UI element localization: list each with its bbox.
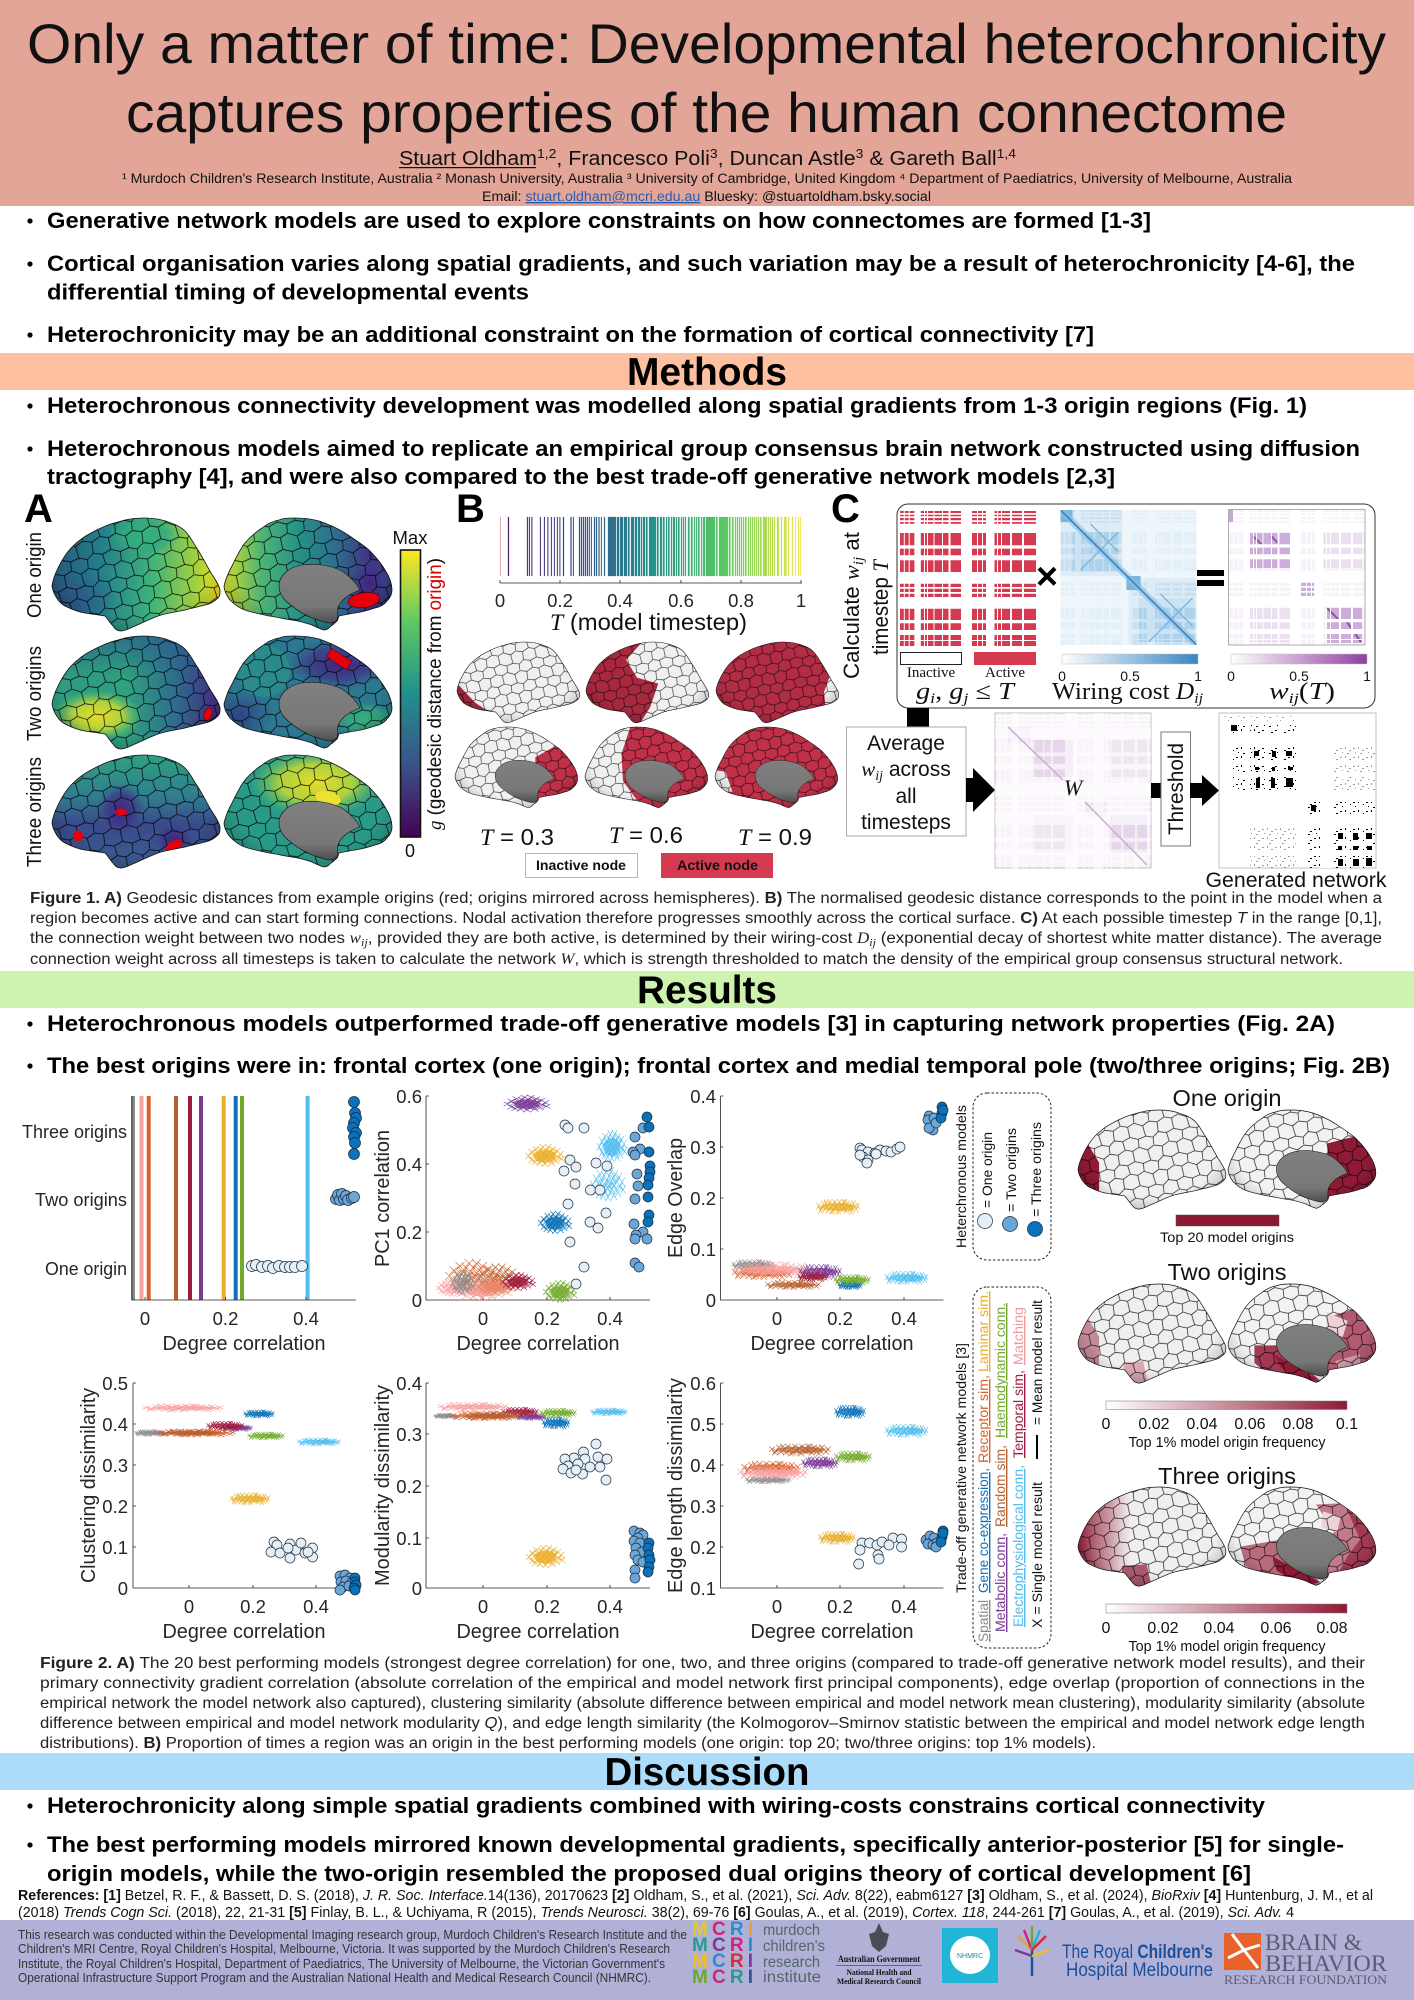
- matrix: wij at T: [1228, 510, 1365, 646]
- chart: edge overlap: 0: [772, 1308, 782, 1329]
- intro bullets: Generative network models are used to explore constraints on how connectomes are formed [1-3]: [47, 208, 1151, 233]
- chart: clustering dissimilarity: 0.2: [102, 1496, 128, 1517]
- label: generated network: Generated network: [1206, 869, 1387, 892]
- math label: wij of T: T): [1309, 679, 1333, 705]
- heading: Three origins: [1158, 1463, 1296, 1489]
- acknowledgements: Institute, the Royal Children's Hospital, Department of Paediatrics, The University of Melbourne, the Victorian Government's: [18, 1957, 665, 1971]
- math label: g condition: ≤: [968, 679, 998, 705]
- box: average across timesteps: [846, 727, 966, 836]
- discussion bullets: The best performing models mirrored known developmental gradients, specifically anterior-posterior [5] for single-: [47, 1832, 1344, 1857]
- references: References: [1] Betzel, R. F., & Bassett, D. S. (2018), J. R. Soc. Interface.14(136), 20170623 [2] Oldham, S., et al. (2021), Sci. Adv. 8(22), eabm6127 [3] Oldham, S., et al. (2024), BioRxiv [4] Huntenburg, J. M., et al: [18, 1888, 1373, 1904]
- brain lateral: [1078, 1487, 1226, 1588]
- figure 2 caption: primary connectivity gradient correlation (absolute correlation of the empirical and model network first principal components), edge overlap (proportion of connections in the: [40, 1675, 1365, 1692]
- chart: clustering dissimilarity: 0.1: [102, 1537, 128, 1558]
- intro bullets: Heterochronicity may be an additional constraint on the formation of cortical connectivity [7]: [47, 322, 1094, 347]
- math label: wiring cost: ij: [1194, 691, 1203, 707]
- vertical label: calculate wij: Calculate w: [839, 565, 864, 679]
- authors: & Gareth Ball: [863, 148, 997, 170]
- figure 1 caption: (exponential decay of shortest white matter distance). The average: [876, 930, 1382, 947]
- brain: T=0.6 lateral: [586, 642, 709, 724]
- timestep axis: 0: [495, 590, 505, 611]
- matrix: generated network: [1219, 713, 1376, 868]
- affiliations: ¹ Murdoch Children's Research Institute, Australia ² Monash University, Australia ³ University of Cambridge, United Kingdom ⁴ Department of Paediatrics, University of Melbourne, Australia: [122, 171, 1293, 186]
- section heading: discussion: Discussion: [604, 1751, 810, 1794]
- legend bar: Top 20 model origins: [1160, 1229, 1294, 1245]
- brain: three origins medial: [224, 749, 392, 870]
- logo: brain and behavior research foundation: [1224, 1930, 1388, 1987]
- legend: trade-off generative network models: Receptor sim,: [975, 1375, 991, 1463]
- colour bar with ticks: 0.1: [1336, 1416, 1358, 1433]
- chart: PC1 correlation: [372, 1086, 655, 1355]
- chart: edge overlap: 0.3: [690, 1137, 716, 1158]
- chart: edge overlap: [665, 1086, 948, 1355]
- figure 1 caption: the connection weight between two nodes w: [30, 930, 360, 947]
- chart: degree correlation by model: Two origins: [35, 1189, 127, 1210]
- chart: modularity dissimilarity: 0: [478, 1596, 488, 1617]
- brain medial: [1228, 1110, 1378, 1211]
- methods bullets: Heterochronous models aimed to replicate an empirical group consensus brain network constructed using diffusion: [47, 436, 1360, 461]
- chart: edge length dissimilarity: Edge length dissimilarity: [665, 1378, 687, 1593]
- chart: clustering dissimilarity: 0.5: [102, 1373, 128, 1394]
- chart: PC1 correlation: Degree correlation: [456, 1333, 620, 1355]
- authors: 1,4: [997, 146, 1016, 161]
- math label: wij of T: ij: [1289, 691, 1299, 707]
- timestep axis: 0.8: [728, 590, 754, 611]
- legend: heterochronous models: [953, 1093, 1051, 1260]
- math label: g condition: g: [916, 679, 928, 705]
- colour bar with ticks: 0.06: [1260, 1620, 1292, 1637]
- title: Only a matter of time: Developmental heterochronicity: [27, 12, 1386, 75]
- chart: modularity dissimilarity: Modularity dissimilarity: [372, 1385, 394, 1586]
- authors: [399, 146, 1016, 170]
- legend: trade-off generative network models: Spatial: [975, 1600, 991, 1642]
- brain: T=0.9 lateral: [716, 642, 840, 724]
- chart: degree correlation by model: 0.4: [293, 1308, 319, 1329]
- logo: murdoch children's research institute: M C R I: [692, 1951, 753, 1972]
- chart: edge overlap: 0: [706, 1290, 716, 1311]
- colour bar: wij: 0: [1227, 668, 1235, 684]
- legend: active node: Active node: [677, 857, 758, 873]
- math label: wiring cost: Wiring cost D: [1052, 679, 1193, 705]
- matrix: active nodes: [900, 511, 1036, 647]
- discussion bullets: Heterochronicity along simple spatial gradients combined with wiring-costs constrains cortical connectivity: [47, 1793, 1266, 1818]
- barcode of nodal activation times: [500, 517, 801, 576]
- discussion bullets: origin models, while the two-origin resembled the proposed dual origins theory of cortical development [6]: [47, 1861, 1251, 1886]
- chart: degree correlation by model: Degree correlation: [162, 1333, 326, 1355]
- references: [18, 1888, 1373, 1921]
- chart: PC1 correlation: 0.2: [534, 1308, 560, 1329]
- vertical label: calculate wij: ij: [851, 557, 867, 565]
- chart: degree correlation by model: [22, 1096, 362, 1355]
- contact line: Email: stuart.oldham@mcri.edu.au Bluesky: @stuartoldham.bsky.social: [482, 189, 931, 204]
- methods bullets: [27, 393, 1360, 489]
- methods bullets: tractography [4], and were also compared to the best trade-off generative network models [2,3]: [47, 464, 1115, 489]
- results bullets: The best origins were in: frontal cortex (one origin); frontal cortex and medial temporal pole (two/three origins; Fig. 2B): [47, 1053, 1390, 1078]
- chart: clustering dissimilarity: 0.4: [303, 1596, 329, 1617]
- logo: murdoch children's research institute: M C R I: [692, 1935, 753, 1956]
- logo: australian government NHMRC: Medical Research Council: [837, 1976, 922, 1986]
- colour bar: geodesic distance: g (geodesic distance from origin): [425, 558, 446, 830]
- arrow to W: [966, 768, 995, 812]
- chart: edge length dissimilarity: 0.6: [690, 1373, 716, 1394]
- chart: degree correlation by model: 0.2: [213, 1308, 238, 1329]
- chart: modularity dissimilarity: 0: [412, 1578, 422, 1599]
- chart: edge overlap: 0.2: [690, 1188, 716, 1209]
- math label: g condition: g: [949, 679, 961, 705]
- logo: murdoch children's research institute: institute: [763, 1969, 821, 1986]
- logo: australian government NHMRC: [836, 1923, 922, 1986]
- legend: trade-off generative network models: Temporal sim,: [1010, 1370, 1026, 1458]
- logo: NHMRC: [942, 1928, 998, 1983]
- chart: modularity dissimilarity: 0.4: [597, 1596, 623, 1617]
- panel letter B: B: [456, 487, 485, 531]
- chart: edge overlap: Degree correlation: [750, 1333, 914, 1355]
- chart: edge length dissimilarity: 0.2: [827, 1596, 853, 1617]
- matrix: W: [995, 713, 1151, 869]
- timestep labels: T = 0.9: [738, 824, 812, 850]
- chart: modularity dissimilarity: 0.2: [396, 1476, 422, 1497]
- box: average across timesteps: across: [883, 758, 951, 781]
- box: average across timesteps: ij: [875, 769, 883, 784]
- multiply sign: ×: [1036, 556, 1058, 598]
- logo: brain and behavior research foundation: RESEARCH FOUNDATION: [1224, 1973, 1387, 1987]
- chart: edge length dissimilarity: 0.4: [690, 1455, 716, 1476]
- chart: edge length dissimilarity: 0: [772, 1596, 782, 1617]
- chart: edge length dissimilarity: 0.3: [690, 1496, 716, 1517]
- box: average across timesteps: w: [861, 757, 883, 784]
- chart: clustering dissimilarity: 0.2: [240, 1596, 266, 1617]
- section heading: methods: Methods: [627, 351, 787, 394]
- connector to threshold: [1151, 783, 1161, 798]
- chart: clustering dissimilarity: Clustering dissimilarity: [78, 1388, 100, 1583]
- brain: three origins lateral: [52, 755, 220, 870]
- chart: edge length dissimilarity: 0.4: [891, 1596, 917, 1617]
- timestep axis: 0.4: [607, 590, 633, 611]
- logo: brain and behavior research foundation: BRAIN &: [1265, 1930, 1362, 1955]
- logo: murdoch children's research institute: M C R I: [692, 1919, 753, 1940]
- chart: modularity dissimilarity: 0.4: [396, 1373, 422, 1394]
- heading: One origin: [1172, 1085, 1282, 1111]
- chart: edge length dissimilarity: 0.2: [690, 1537, 716, 1558]
- connector: [907, 708, 929, 727]
- title: captures properties of the human connectome: [126, 81, 1287, 144]
- chart: modularity dissimilarity: 0.1: [396, 1528, 422, 1549]
- authors: 1,2: [537, 146, 556, 161]
- panel A: geodesic distance brains: [24, 487, 446, 870]
- timestep axis: T (model timestep): [550, 609, 747, 635]
- colour bar with ticks: 0.02: [1147, 1620, 1179, 1637]
- section heading: discussion: [0, 1751, 1414, 1794]
- legend: active node: [661, 853, 773, 878]
- figure 1 caption: region becomes active and can start forming connections. Nodal activation therefore progresses smoothly across the cortical surface. C) At each possible timestep T in the range [0,1],: [30, 910, 1382, 927]
- colour bar: geodesic distance: [392, 528, 446, 861]
- timestep axis: [495, 580, 806, 635]
- brain: T=0.3 medial: [455, 727, 579, 810]
- chart: degree correlation by model: Three origins: [22, 1121, 127, 1142]
- chart: PC1 correlation: 0.4: [396, 1154, 422, 1175]
- legend: trade-off generative network models: Electrophysiological conn,: [1010, 1465, 1026, 1627]
- figure 1 caption: ij: [361, 937, 368, 949]
- panel: three origins map: [1078, 1463, 1378, 1655]
- legend: trade-off generative network models: Random sim,: [992, 1445, 1008, 1527]
- chart: edge overlap: 0.4: [690, 1086, 716, 1107]
- chart: edge overlap: 0.1: [690, 1239, 716, 1260]
- colour bar with ticks: 0: [1102, 1620, 1111, 1637]
- chart: modularity dissimilarity: [372, 1373, 655, 1643]
- colour bar: geodesic distance: Max: [392, 528, 428, 548]
- logo: murdoch children's research institute: [692, 1919, 825, 1988]
- chart: clustering dissimilarity: 0.3: [102, 1455, 128, 1476]
- legend: trade-off generative network models: Haemodynamic conn.: [992, 1303, 1008, 1438]
- matrix: wiring cost: [1060, 510, 1196, 646]
- logo: royal children's hospital: [1015, 1926, 1213, 1981]
- legend: inactive and active swatches: [900, 652, 1036, 681]
- methods bullets: Heterochronous connectivity development was modelled along spatial gradients from 1-3 origin regions (Fig. 1): [47, 393, 1307, 418]
- panel letter A: A: [24, 487, 53, 531]
- authors: , Duncan Astle: [718, 148, 856, 170]
- chart: modularity dissimilarity: 0.2: [534, 1596, 560, 1617]
- figure 2 caption: distributions). B) Proportion of times a region was an origin in the best performing models (one origin: top 20; two/three origins: top 1% models).: [40, 1735, 1096, 1752]
- legend: heterochronous models: Heterchronous models: [953, 1105, 969, 1248]
- timestep axis: 1: [796, 590, 806, 611]
- colour bar with ticks: 0.08: [1316, 1620, 1348, 1637]
- brain: T=0.9 medial: [715, 727, 838, 810]
- box: threshold: Threshold: [1165, 743, 1188, 835]
- timestep axis: 0.6: [668, 590, 694, 611]
- panel: two origins map: [1078, 1259, 1378, 1451]
- brain: T=0.6 medial: [585, 727, 709, 810]
- colour bar with ticks: [1102, 1401, 1358, 1451]
- timestep axis: 0.2: [547, 590, 573, 611]
- brain medial: [1228, 1284, 1378, 1385]
- arrow to generated network: [1190, 775, 1219, 806]
- chart: edge overlap: 0.2: [827, 1308, 853, 1329]
- timestep labels: [480, 822, 812, 850]
- brain: one origin lateral: [52, 518, 220, 632]
- math label: wij of T: (: [1299, 679, 1309, 705]
- figure 2 caption: [40, 1655, 1365, 1752]
- legend: trade-off generative network models: [953, 1287, 1051, 1648]
- brain: two origins lateral: [51, 636, 220, 751]
- colour bar: wij: 0.5: [1289, 668, 1309, 684]
- figure 2 caption: difference between empirical and model network modularity Q), and edge length similarity (the Kolmogorov–Smirnov statistic between the empirical and model network edge length: [40, 1715, 1365, 1732]
- logo: australian government NHMRC: National Health and: [846, 1967, 912, 1977]
- acknowledgements: Operational Infrastructure Support Program and the Australian National Health and Medical Research Council (NHMRC).: [18, 1971, 651, 1985]
- colour bar with ticks: 0.04: [1186, 1416, 1218, 1433]
- authors: 3: [710, 146, 718, 161]
- brain medial: [1228, 1487, 1378, 1588]
- logo: murdoch children's research institute: children's: [763, 1938, 825, 1955]
- section heading: results: Results: [637, 969, 777, 1012]
- figure 1 caption: D: [856, 930, 876, 949]
- logo: royal children's hospital: The Royal Children's: [1062, 1942, 1213, 1963]
- chart: PC1 correlation: PC1 correlation: [372, 1130, 394, 1267]
- box: average across timesteps: timesteps: [861, 811, 951, 834]
- discussion bullets: [27, 1793, 1344, 1886]
- legend: trade-off generative network models: Laminar sim.: [975, 1291, 991, 1372]
- figure 1 caption: , provided they are both active, is determined by their wiring-cost: [368, 930, 857, 947]
- vertical label: calculate wij: at: [839, 532, 864, 557]
- panel: one origin map: [1078, 1085, 1378, 1245]
- colour bar: wiring cost: 1: [1194, 668, 1202, 684]
- figure 1 caption: connection weight across all timesteps is taken to calculate the network W, which is strength thresholded to match the density of the empirical group consensus structural network.: [30, 951, 1343, 968]
- brain: two origins medial: [224, 636, 392, 748]
- intro bullets: Cortical organisation varies along spatial gradients, and such variation may be a result of heterochronicity [4-6], the: [47, 251, 1355, 276]
- colour bar with ticks: Top 1% model origin frequency: [1128, 1638, 1326, 1655]
- chart: clustering dissimilarity: [78, 1373, 361, 1643]
- colour bar with ticks: 0.04: [1203, 1620, 1235, 1637]
- figure 2 caption: Figure 2. A) The 20 best performing models (strongest degree correlation) for one, two, and three origins (compared to trade-off generative network model results), and their: [40, 1655, 1365, 1672]
- row label: three origins: Three origins: [24, 757, 46, 867]
- figure 2 caption: empirical network the model network also captured), clustering similarity (absolute difference between empirical and model network mean clustering), modularity similarity (absolute: [40, 1695, 1365, 1712]
- legend: trade-off generative network models: X = Single model result: [1029, 1482, 1045, 1628]
- logo: NHMRC: NHMRC: [957, 1953, 983, 1960]
- legend: inactive node: [526, 854, 638, 878]
- colour bar with ticks: 0: [1102, 1416, 1111, 1433]
- legend: heterochronous models: = Three origins: [1028, 1122, 1044, 1217]
- chart: edge overlap: 0.4: [891, 1308, 917, 1329]
- panel B: model timestep: [455, 487, 840, 878]
- chart: modularity dissimilarity: Degree correlation: [456, 1621, 620, 1643]
- chart: edge length dissimilarity: Degree correlation: [750, 1621, 914, 1643]
- chart: modularity dissimilarity: 0.3: [396, 1424, 422, 1445]
- logo: royal children's hospital: Hospital Melbourne: [1066, 1960, 1213, 1981]
- brain: T=0.3 lateral: [457, 642, 580, 724]
- box: average across timesteps: all: [895, 785, 917, 808]
- authors: , Francesco Poli: [556, 148, 710, 170]
- brain lateral: [1078, 1284, 1226, 1385]
- chart: clustering dissimilarity: 0: [184, 1596, 194, 1617]
- brain lateral: [1078, 1110, 1226, 1211]
- authors: 3: [856, 146, 863, 161]
- legend: trade-off generative network models: Metabolic conn,: [992, 1533, 1008, 1632]
- colour bar: wiring cost: 0: [1058, 668, 1066, 684]
- math label: wij of T: w: [1269, 679, 1285, 705]
- chart: edge length dissimilarity: 0.5: [690, 1414, 716, 1435]
- colour bar with ticks: 0.06: [1234, 1416, 1266, 1433]
- chart: edge length dissimilarity: [665, 1373, 948, 1643]
- results bullets: [27, 1011, 1390, 1078]
- colour bar with ticks: 0.08: [1282, 1416, 1314, 1433]
- timestep labels: T = 0.6: [609, 822, 683, 848]
- legend: trade-off generative network models: = Mean model result: [1029, 1300, 1045, 1425]
- legend: inactive and active swatches: Active: [985, 665, 1025, 681]
- row label: one origin: One origin: [24, 532, 46, 618]
- brain: one origin medial: [224, 518, 392, 633]
- legend bar: [1160, 1215, 1294, 1245]
- timestep labels: T = 0.3: [480, 824, 554, 850]
- box: average across timesteps: Average: [867, 732, 945, 755]
- matrix: W: W: [1064, 775, 1084, 800]
- math label: g condition: T: [998, 679, 1012, 705]
- chart: edge length dissimilarity: 0.1: [690, 1578, 716, 1599]
- figure 1 caption: [30, 890, 1382, 968]
- logo: murdoch children's research institute: murdoch: [763, 1922, 820, 1939]
- colour bar with ticks: Top 1% model origin frequency: [1128, 1434, 1326, 1451]
- title: [27, 12, 1386, 144]
- box: threshold: [1161, 732, 1190, 846]
- panel letter C: C: [831, 487, 860, 531]
- chart: clustering dissimilarity: 0: [118, 1578, 128, 1599]
- acknowledgements: [18, 1928, 687, 1985]
- acknowledgements: Children's MRI Centre, Royal Children's Hospital, Melbourne, Victoria. It was supported by the Murdoch Children's Research: [18, 1942, 670, 1956]
- panel: footer: [0, 1919, 1414, 2000]
- legend: inactive node: Inactive node: [536, 857, 626, 873]
- chart: edge overlap: Edge Overlap: [665, 1138, 687, 1258]
- chart: clustering dissimilarity: 0.4: [102, 1414, 128, 1435]
- intro bullets: [27, 208, 1355, 347]
- section heading: methods: [0, 351, 1414, 394]
- authors: Stuart Oldham: [399, 148, 528, 170]
- figure 1 caption: ij: [869, 937, 876, 949]
- equals sign: [1197, 570, 1224, 586]
- logo: brain and behavior research foundation: BEHAVIOR: [1265, 1951, 1388, 1976]
- acknowledgements: This research was conducted within the Developmental Imaging research group, Murdoch Children's Research Institute and the: [18, 1928, 687, 1942]
- chart: PC1 correlation: 0.6: [396, 1086, 422, 1107]
- colour bar: wij: 1: [1363, 668, 1371, 684]
- legend: trade-off generative network models: Trade-off generative network models [3]: [953, 1343, 969, 1593]
- legend: inactive and active swatches: Inactive: [907, 665, 955, 681]
- chart: PC1 correlation: 0.2: [396, 1222, 422, 1243]
- rounded box: per-timestep calculation: [897, 504, 1375, 708]
- colour bar: wij: [1227, 654, 1371, 684]
- colour bar with ticks: 0.02: [1138, 1416, 1170, 1433]
- logo: australian government NHMRC: Australian Government: [838, 1954, 920, 1964]
- colour bar: wiring cost: 0.5: [1120, 668, 1140, 684]
- panel: header: [0, 0, 1414, 206]
- chart: PC1 correlation: 0.4: [597, 1308, 623, 1329]
- chart: clustering dissimilarity: Degree correlation: [162, 1621, 326, 1643]
- legend: heterochronous models: = Two origins: [1003, 1128, 1019, 1212]
- references: (2018) Trends Cogn Sci. (2018), 22, 21-31 [5] Finlay, B. L., & Uchiyama, R (2015), Trends Neurosci. 38(2), 69-76 [6] Goulas, A., et al. (2019), Cortex. 118, 244-261 [7] Goulas, A., et al. (2019), Sci. Adv. 4: [18, 1905, 1294, 1921]
- chart: degree correlation by model: One origin: [45, 1258, 127, 1279]
- colour bar: wiring cost: [1058, 654, 1202, 684]
- colour bar: geodesic distance: 0: [405, 841, 415, 861]
- section heading: results: [0, 969, 1414, 1012]
- math label: g condition: ,: [935, 679, 949, 705]
- legend: heterochronous models: = One origin: [979, 1132, 995, 1208]
- chart: PC1 correlation: 0: [478, 1308, 488, 1329]
- math label: g condition: j: [961, 691, 968, 707]
- legend: trade-off generative network models: Gene co-expression,: [975, 1468, 991, 1593]
- heading: Two origins: [1168, 1259, 1286, 1285]
- chart: PC1 correlation: 0: [412, 1290, 422, 1311]
- results bullets: Heterochronous models outperformed trade-off generative models [3] in capturing network properties (Fig. 2A): [47, 1011, 1335, 1036]
- intro bullets: differential timing of developmental events: [47, 280, 529, 304]
- math label: g condition: i: [930, 691, 935, 707]
- logo: murdoch children's research institute: M C R I: [692, 1967, 753, 1988]
- logo: murdoch children's research institute: research: [763, 1954, 820, 1971]
- row label: two origins: Two origins: [24, 646, 46, 741]
- colour bar with ticks: [1102, 1604, 1348, 1655]
- legend: trade-off generative network models: Matching: [1010, 1307, 1026, 1365]
- panel C: model pipeline: [831, 487, 1387, 892]
- vertical label: timestep T: timestep T: [868, 558, 893, 655]
- chart: degree correlation by model: 0: [140, 1308, 150, 1329]
- figure 1 caption: Figure 1. A) Geodesic distances from example origins (red; origins mirrored across hemispheres). B) The normalised geodesic distance corresponds to the point in the model when a: [30, 890, 1382, 907]
